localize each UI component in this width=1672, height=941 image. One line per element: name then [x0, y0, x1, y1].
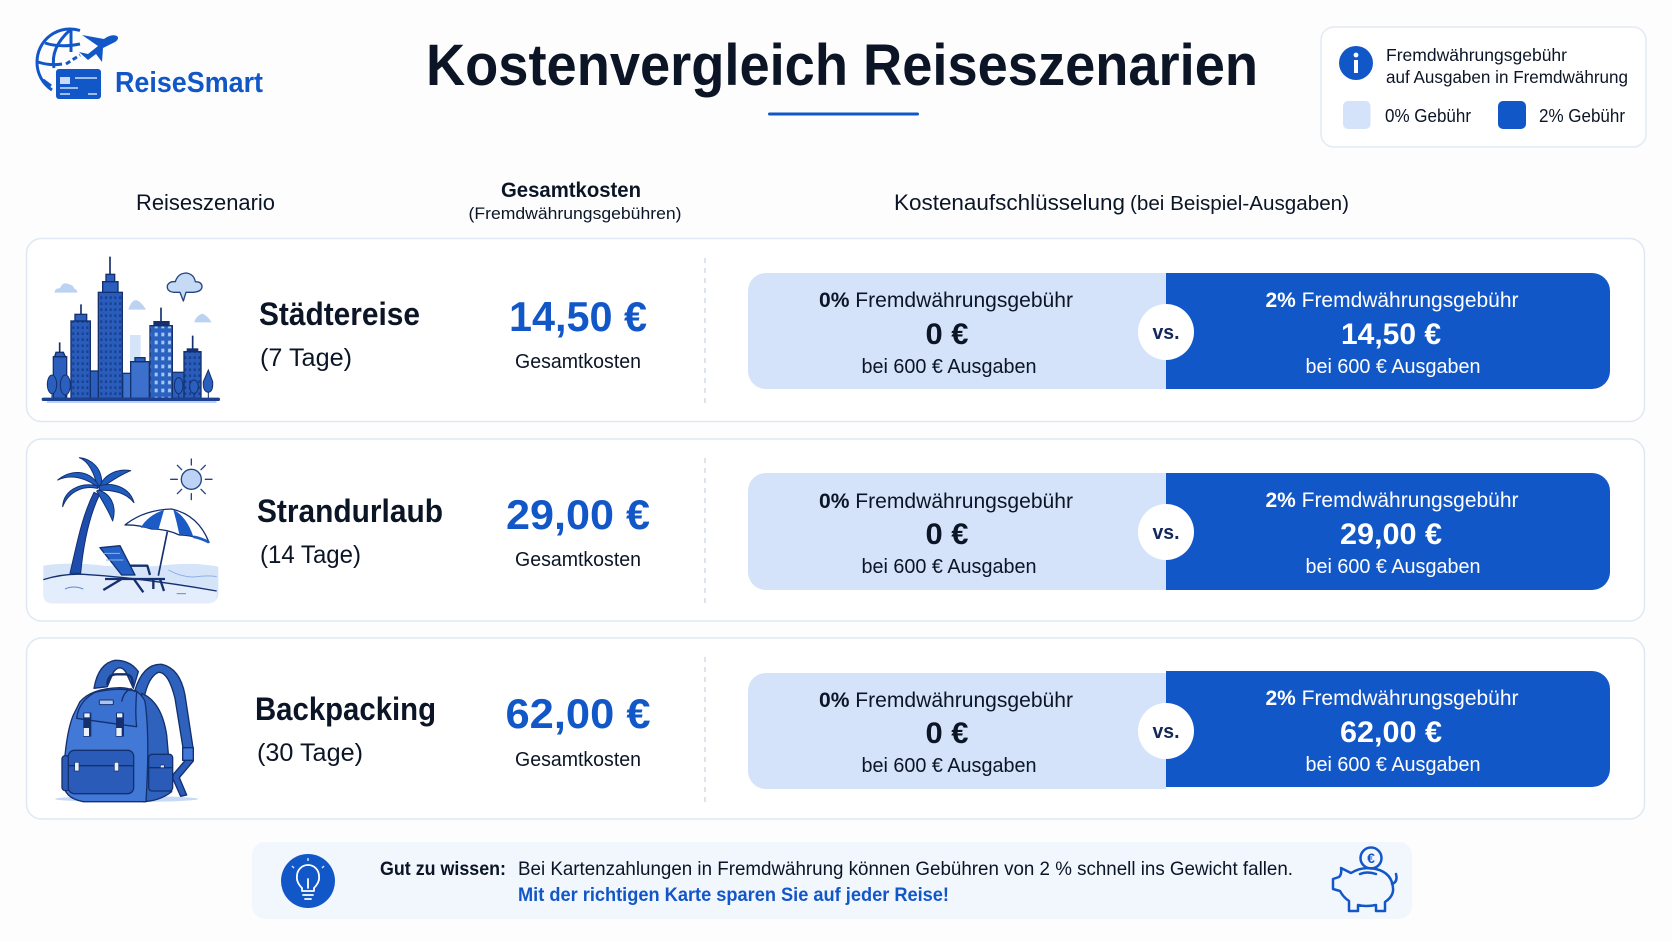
- panel: Backpacking: [26, 638, 1644, 819]
- 0% side: 0% Fremdwährungsgebühr: [819, 688, 1073, 712]
- legend swatch 0%: [1343, 101, 1370, 129]
- total cost label: Gesamtkosten: [515, 749, 641, 771]
- total cost: 14,50 €: [509, 293, 647, 340]
- callout label: Gut zu wissen:: [380, 858, 506, 880]
- scenario name: Backpacking: [255, 691, 436, 727]
- icon: credit card: [56, 69, 101, 99]
- icon: city skyline: [42, 257, 220, 403]
- 2% side: [1266, 288, 1518, 378]
- 0% side: 0 €: [926, 717, 969, 750]
- vs badge: [1138, 504, 1194, 560]
- column heading: Kostenaufschlüsselung: Kostenaufschlüsselung: [894, 190, 1125, 215]
- legend: [1321, 27, 1646, 147]
- vs badge: [1138, 703, 1194, 759]
- vs badge: vs.: [1152, 721, 1180, 743]
- legend swatch 2%: [1498, 101, 1526, 129]
- 0% side: bei 600 € Ausgaben: [862, 755, 1036, 777]
- 0% side: 0 €: [926, 518, 969, 551]
- 2% side: bei 600 € Ausgaben: [1306, 754, 1480, 776]
- icon: info: [1339, 46, 1373, 80]
- panel: Städtereise: [26, 238, 1644, 422]
- callout: Gut zu wissen: [252, 842, 1412, 919]
- scenario name: Strandurlaub: [257, 493, 443, 529]
- 2% side: 2% Fremdwährungsgebühr: [1266, 686, 1518, 710]
- legend description: auf Ausgaben in Fremdwährung: [1386, 67, 1628, 87]
- column heading: Reiseszenario: Reiseszenario: [136, 190, 275, 215]
- total cost label: Gesamtkosten: [515, 351, 641, 373]
- total cost label: Gesamtkosten: [515, 549, 641, 571]
- scenario duration: (14 Tage): [260, 541, 361, 569]
- callout text: Bei Kartenzahlungen in Fremdwährung können Gebühren von 2 % schnell ins Gewicht fallen.: [518, 858, 1293, 880]
- callout highlight: Mit der richtigen Karte sparen Sie auf jeder Reise!: [518, 884, 949, 906]
- 0% side: 0% Fremdwährungsgebühr: [819, 489, 1073, 513]
- logo wordmark: ReiseSmart: [115, 67, 263, 99]
- 2% side: bei 600 € Ausgaben: [1306, 556, 1480, 578]
- scenario duration: (7 Tage): [260, 344, 352, 372]
- icon: light bulb: [281, 854, 335, 908]
- legend label 0%: 0% Gebühr: [1385, 106, 1471, 126]
- scenario duration: (30 Tage): [257, 739, 363, 767]
- title: Kostenvergleich Reiseszenarien: [426, 33, 1258, 98]
- total cost: 29,00 €: [506, 491, 650, 538]
- 0% side: bei 600 € Ausgaben: [862, 556, 1036, 578]
- column heading: Kostenaufschlüsselung: (bei Beispiel-Ausgaben): [1130, 193, 1349, 215]
- column heading: Gesamtkosten: Gesamtkosten: [501, 179, 641, 202]
- 0% side: 0% Fremdwährungsgebühr: [819, 288, 1073, 312]
- 0% side: [819, 688, 1073, 777]
- comparison bar: [748, 671, 1610, 789]
- scenario name: Städtereise: [259, 296, 420, 332]
- panel: Strandurlaub: [26, 439, 1644, 621]
- 0% side: [819, 288, 1073, 378]
- 2% side: 29,00 €: [1340, 518, 1442, 551]
- vs badge: vs.: [1152, 322, 1180, 344]
- 2% side: [1266, 488, 1518, 578]
- vs badge: [1138, 304, 1194, 360]
- 2% side: [1266, 686, 1518, 776]
- total cost: 62,00 €: [506, 690, 650, 737]
- icon: airplane: [79, 35, 118, 62]
- comparison bar: [748, 273, 1610, 389]
- icon: globe: [37, 29, 80, 90]
- icon: piggy bank: €: [1367, 850, 1375, 866]
- comparison bar: [748, 473, 1610, 590]
- 2% side: bei 600 € Ausgaben: [1306, 356, 1480, 378]
- legend label 2%: 2% Gebühr: [1539, 106, 1625, 126]
- legend description: Fremdwährungsgebühr: [1386, 45, 1567, 65]
- icon: backpack: [55, 660, 198, 802]
- logo: ReiseSmart: [37, 29, 263, 99]
- icon: piggy bank: [1333, 848, 1396, 911]
- 0% side: 0 €: [926, 318, 969, 351]
- 2% side: 2% Fremdwährungsgebühr: [1266, 488, 1518, 512]
- icon: beach scene: [43, 458, 218, 603]
- vs badge: vs.: [1152, 522, 1180, 544]
- column heading: Gesamtkosten: (Fremdwährungsgebühren): [468, 204, 682, 223]
- 2% side: 2% Fremdwährungsgebühr: [1266, 288, 1518, 312]
- 2% side: 62,00 €: [1340, 716, 1442, 749]
- 0% side: [819, 489, 1073, 578]
- 2% side: 14,50 €: [1341, 318, 1441, 351]
- 0% side: bei 600 € Ausgaben: [862, 356, 1036, 378]
